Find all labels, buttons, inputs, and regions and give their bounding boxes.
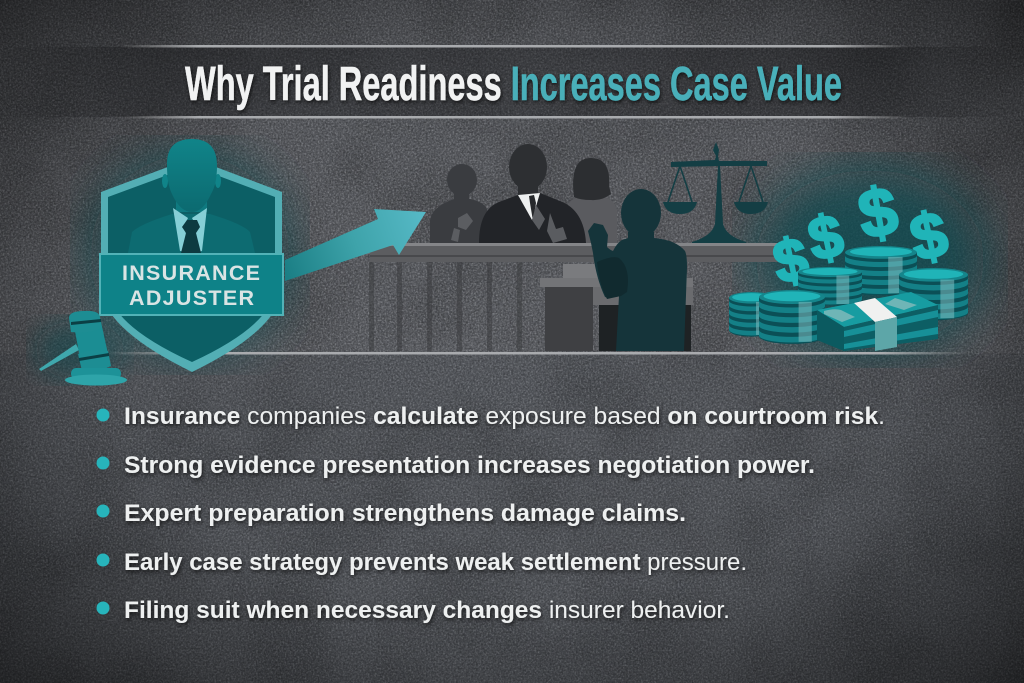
railing bbox=[369, 243, 780, 351]
person: judge bbox=[479, 144, 586, 243]
icon: shield with insurance adjuster bbox=[100, 139, 283, 372]
icon: shield with insurance adjuster: ADJUSTER bbox=[129, 286, 254, 310]
dollar signs: $ bbox=[853, 172, 903, 254]
bullet 1: Insurance companies calculate exposure based on courtroom risk. bbox=[124, 403, 885, 430]
podium bbox=[540, 264, 693, 351]
title text: Why Trial Readiness Increases Case Value bbox=[185, 58, 842, 111]
icon: stacks of money bbox=[729, 172, 968, 351]
coin stacks bbox=[845, 246, 917, 295]
illustration: courtroom bbox=[369, 142, 780, 351]
bullet 3: Expert preparation strengthens damage claims. bbox=[124, 500, 686, 527]
rule beneath illustration bbox=[108, 352, 968, 354]
icon: gavel bbox=[39, 311, 127, 386]
bottom title rule bbox=[120, 116, 910, 118]
shirt collar bbox=[173, 208, 207, 253]
shield bbox=[101, 158, 282, 372]
person: woman juror bbox=[568, 158, 617, 243]
bullet 5: Filing suit when necessary changes insurer behavior. bbox=[124, 597, 730, 624]
person: attorney bbox=[588, 189, 687, 351]
band label: INSURANCE bbox=[122, 261, 260, 285]
icon: scales of justice bbox=[663, 142, 768, 243]
dollar signs: $ bbox=[802, 201, 849, 274]
arrow bbox=[285, 209, 426, 281]
name band bbox=[100, 254, 283, 315]
bullet 2: Strong evidence presentation increases negotiation power. bbox=[124, 452, 815, 479]
dollar signs: $ bbox=[767, 224, 814, 297]
dollar signs: $ bbox=[904, 197, 954, 275]
person: left juror bbox=[430, 164, 487, 243]
banded cash brick bbox=[817, 292, 938, 351]
dollar signs bbox=[767, 172, 954, 297]
bullet 4: Early case strategy prevents weak settlement pressure. bbox=[124, 549, 747, 576]
top title rule bbox=[120, 45, 910, 48]
bullet list bbox=[96, 403, 885, 624]
adjuster silhouette bbox=[128, 139, 255, 253]
tie bbox=[181, 220, 201, 253]
